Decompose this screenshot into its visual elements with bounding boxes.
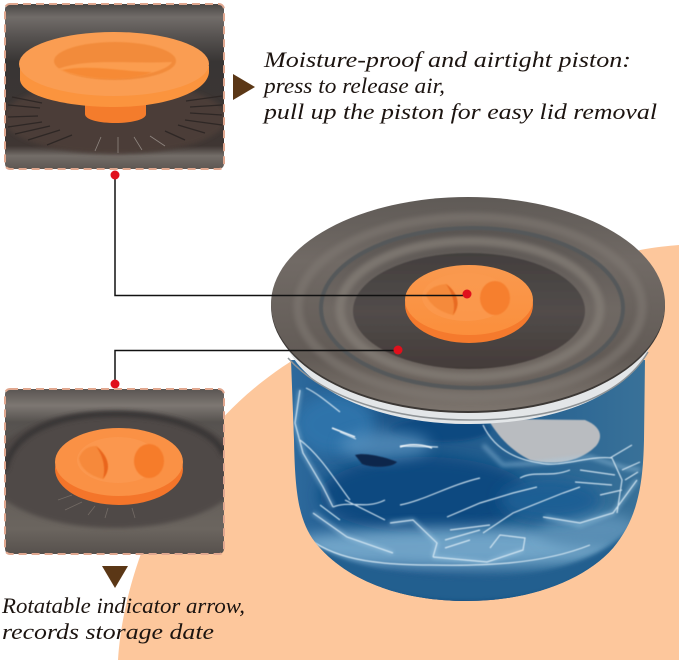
raised piston knob: [19, 32, 209, 123]
lid: [271, 197, 665, 413]
top-view piston knob: [55, 428, 183, 505]
container body with wolf print: [291, 360, 645, 601]
wolf fur glow: [295, 390, 640, 562]
silver rim: [282, 300, 656, 424]
food container: [271, 197, 665, 610]
text block: piston description: Moisture-proof and airtight piston:: [263, 47, 631, 72]
indicator tick marks: [58, 495, 135, 518]
connector line: indicator arrow: [110, 346, 402, 388]
peach background shape: [118, 245, 679, 660]
wolf fur strokes: [295, 388, 640, 565]
arrow: down triangle: [102, 566, 128, 588]
connector line: piston: [110, 170, 472, 298]
text block: indicator description: records storage date: [2, 619, 214, 644]
panel: indicator close-up: [0, 389, 243, 554]
dial tick marks: [8, 96, 222, 145]
text block: piston description: press to release air,: [262, 73, 445, 98]
text block: indicator description: [1, 593, 245, 644]
text block: piston description: [262, 47, 657, 124]
panel: piston close-up: [3, 4, 227, 169]
text block: piston description: pull up the piston for easy lid removal: [262, 99, 657, 124]
text block: indicator description: Rotatable indicator arrow,: [1, 593, 245, 618]
lid piston knob: [405, 265, 533, 343]
arrow: right triangle: [233, 74, 255, 100]
